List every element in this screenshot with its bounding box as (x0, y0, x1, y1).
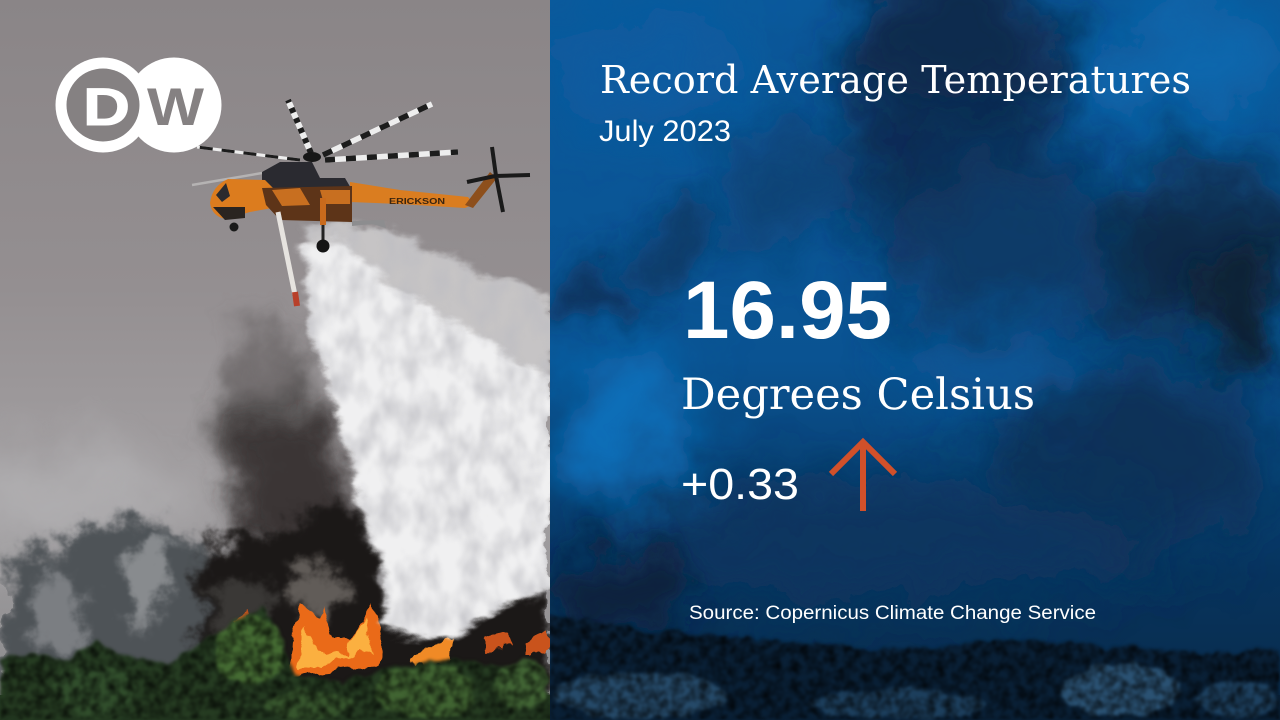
unit label: Degrees Celsius (681, 370, 1035, 420)
logo: DW: D (83, 78, 130, 137)
fire (234, 603, 550, 677)
cabin (210, 179, 275, 219)
dark tree line (550, 615, 1280, 720)
logo: DW (56, 58, 222, 152)
mist (300, 225, 550, 600)
burnt tree line (0, 495, 550, 700)
panel: wildfire photograph (0, 0, 550, 720)
landing gear (278, 212, 296, 300)
water plume (300, 225, 550, 640)
solid spray (303, 240, 550, 640)
tail rotor (467, 147, 530, 212)
source note: Source: Copernicus Climate Change Service (689, 603, 1096, 624)
engine housing (262, 162, 352, 190)
dark smoke clouds (550, 0, 1280, 630)
anomaly value: +0.33 (681, 460, 799, 509)
helicopter (192, 100, 530, 306)
smoke column (0, 322, 370, 555)
midsection (262, 186, 352, 222)
green trees (0, 606, 550, 720)
panel: blue tinted smoke photograph (550, 0, 1280, 720)
icon: up arrow (831, 442, 895, 511)
tail boom (350, 182, 474, 208)
helicopter: ERICKSON (389, 197, 445, 206)
logo: DW: W (147, 78, 204, 137)
rotor head (303, 152, 321, 162)
tail pylon (465, 172, 497, 208)
key figure: 16.95 (683, 265, 892, 356)
title: Record Average Temperatures (600, 58, 1191, 102)
rotor blades (192, 100, 458, 185)
subtitle: July 2023 (599, 115, 731, 148)
